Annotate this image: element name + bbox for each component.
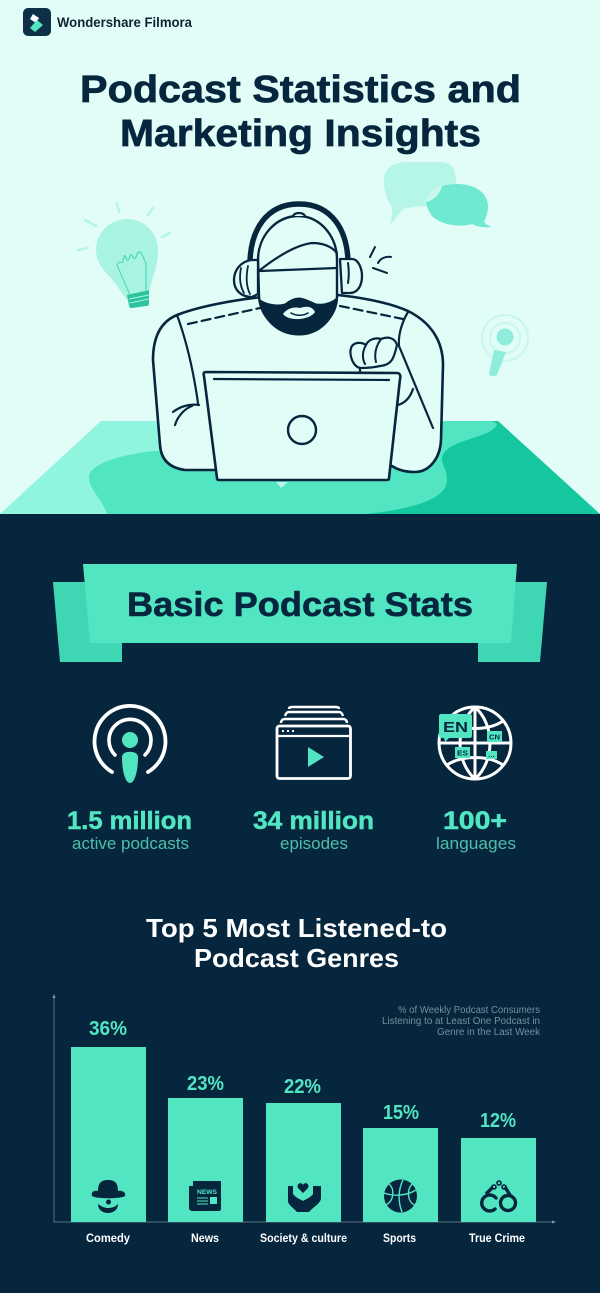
bar: Sports 15%: Sports	[383, 1233, 416, 1245]
stat: 1.5 million active podcasts: 1.5 million	[67, 807, 192, 835]
bar: Comedy 36%: 36%	[89, 1018, 127, 1040]
bar: Society & culture 22%: 22%	[284, 1076, 321, 1098]
bar: Sports 15%: 15%	[383, 1102, 419, 1124]
title: Podcast Statistics and	[80, 69, 521, 111]
icon: globe with language tags: CN	[489, 734, 500, 742]
bar chart: genres	[52, 994, 556, 1245]
stat: 34 million episodes	[253, 707, 374, 853]
stat: 1.5 million active podcasts: active podcasts	[72, 835, 189, 853]
chart note: Genre in the Last Week	[437, 1027, 540, 1038]
ear cups	[234, 260, 258, 297]
icon: podcast	[94, 706, 166, 783]
logo: Wondershare Filmora	[23, 8, 192, 36]
icon: newspaper	[189, 1181, 221, 1211]
icon: hands with heart	[288, 1183, 321, 1212]
icon: globe with language tags: EN	[443, 719, 468, 736]
icon: basketball	[384, 1180, 417, 1212]
heading: top 5 genres: Podcast Genres	[194, 943, 399, 973]
icon: clown with hat	[92, 1180, 125, 1213]
torso and arms	[153, 295, 443, 472]
chart note: Listening to at Least One Podcast in	[382, 1016, 540, 1027]
icon: lightbulb	[78, 203, 170, 308]
icon: globe with language tags: ES	[457, 750, 468, 758]
sound marks	[370, 247, 391, 273]
stat: 34 million episodes: 34 million	[253, 807, 374, 835]
icon: small podcast	[482, 315, 528, 376]
logo: Wondershare Filmora: Wondershare Filmora	[57, 14, 192, 30]
cap band	[260, 243, 337, 271]
bar: Society & culture 22%: Society & culture	[260, 1233, 347, 1245]
heading: top 5 genres	[146, 913, 447, 973]
banner: Basic Podcast Stats: Basic Podcast Stats	[127, 586, 473, 624]
illustration: desk	[0, 421, 600, 514]
icon: globe with language tags: ...	[488, 753, 495, 759]
bar: News 23%: News	[191, 1233, 219, 1245]
icon: globe with language tags	[439, 707, 511, 779]
title: Marketing Insights	[120, 113, 481, 155]
icon: video window stack	[277, 707, 350, 778]
bar: True Crime 12%: True Crime	[469, 1233, 525, 1245]
icon: handcuffs	[482, 1181, 516, 1211]
icon: speech bubbles	[384, 162, 491, 227]
bar: True Crime 12%	[461, 1110, 536, 1245]
chart note: % of Weekly Podcast Consumers	[398, 1005, 540, 1016]
stat: 100+ languages: 100+	[443, 807, 507, 835]
stat: 100+ languages: languages	[436, 835, 516, 853]
bar: Society & culture 22%	[260, 1076, 347, 1245]
bar: News 23%	[168, 1073, 243, 1245]
title	[80, 69, 521, 155]
bar: News 23%: 23%	[187, 1073, 224, 1095]
bar: Comedy 36%: Comedy	[86, 1233, 131, 1245]
head	[258, 216, 337, 333]
laptop	[204, 372, 400, 480]
banner: Basic Podcast Stats	[53, 564, 547, 662]
heading: top 5 genres: Top 5 Most Listened-to	[146, 913, 447, 943]
chart note	[382, 1005, 540, 1038]
bar: Comedy 36%	[71, 1018, 146, 1245]
panel: dark stats background	[0, 514, 600, 1293]
sleeve lines	[173, 312, 433, 428]
headband	[250, 204, 348, 272]
chart axes	[52, 994, 556, 1224]
bar: Sports 15%	[363, 1102, 438, 1245]
panel: header background	[0, 0, 600, 514]
illustration: man with headphones at laptop	[153, 204, 443, 480]
bar: True Crime 12%: 12%	[480, 1110, 516, 1132]
stat: 100+ languages	[436, 707, 516, 853]
stat: 34 million episodes: episodes	[280, 835, 348, 853]
icon: newspaper: NEWS	[197, 1189, 218, 1196]
shirt seam dashes	[188, 306, 403, 324]
beard	[260, 298, 337, 335]
stat: 1.5 million active podcasts	[67, 706, 192, 853]
hand	[350, 338, 397, 372]
